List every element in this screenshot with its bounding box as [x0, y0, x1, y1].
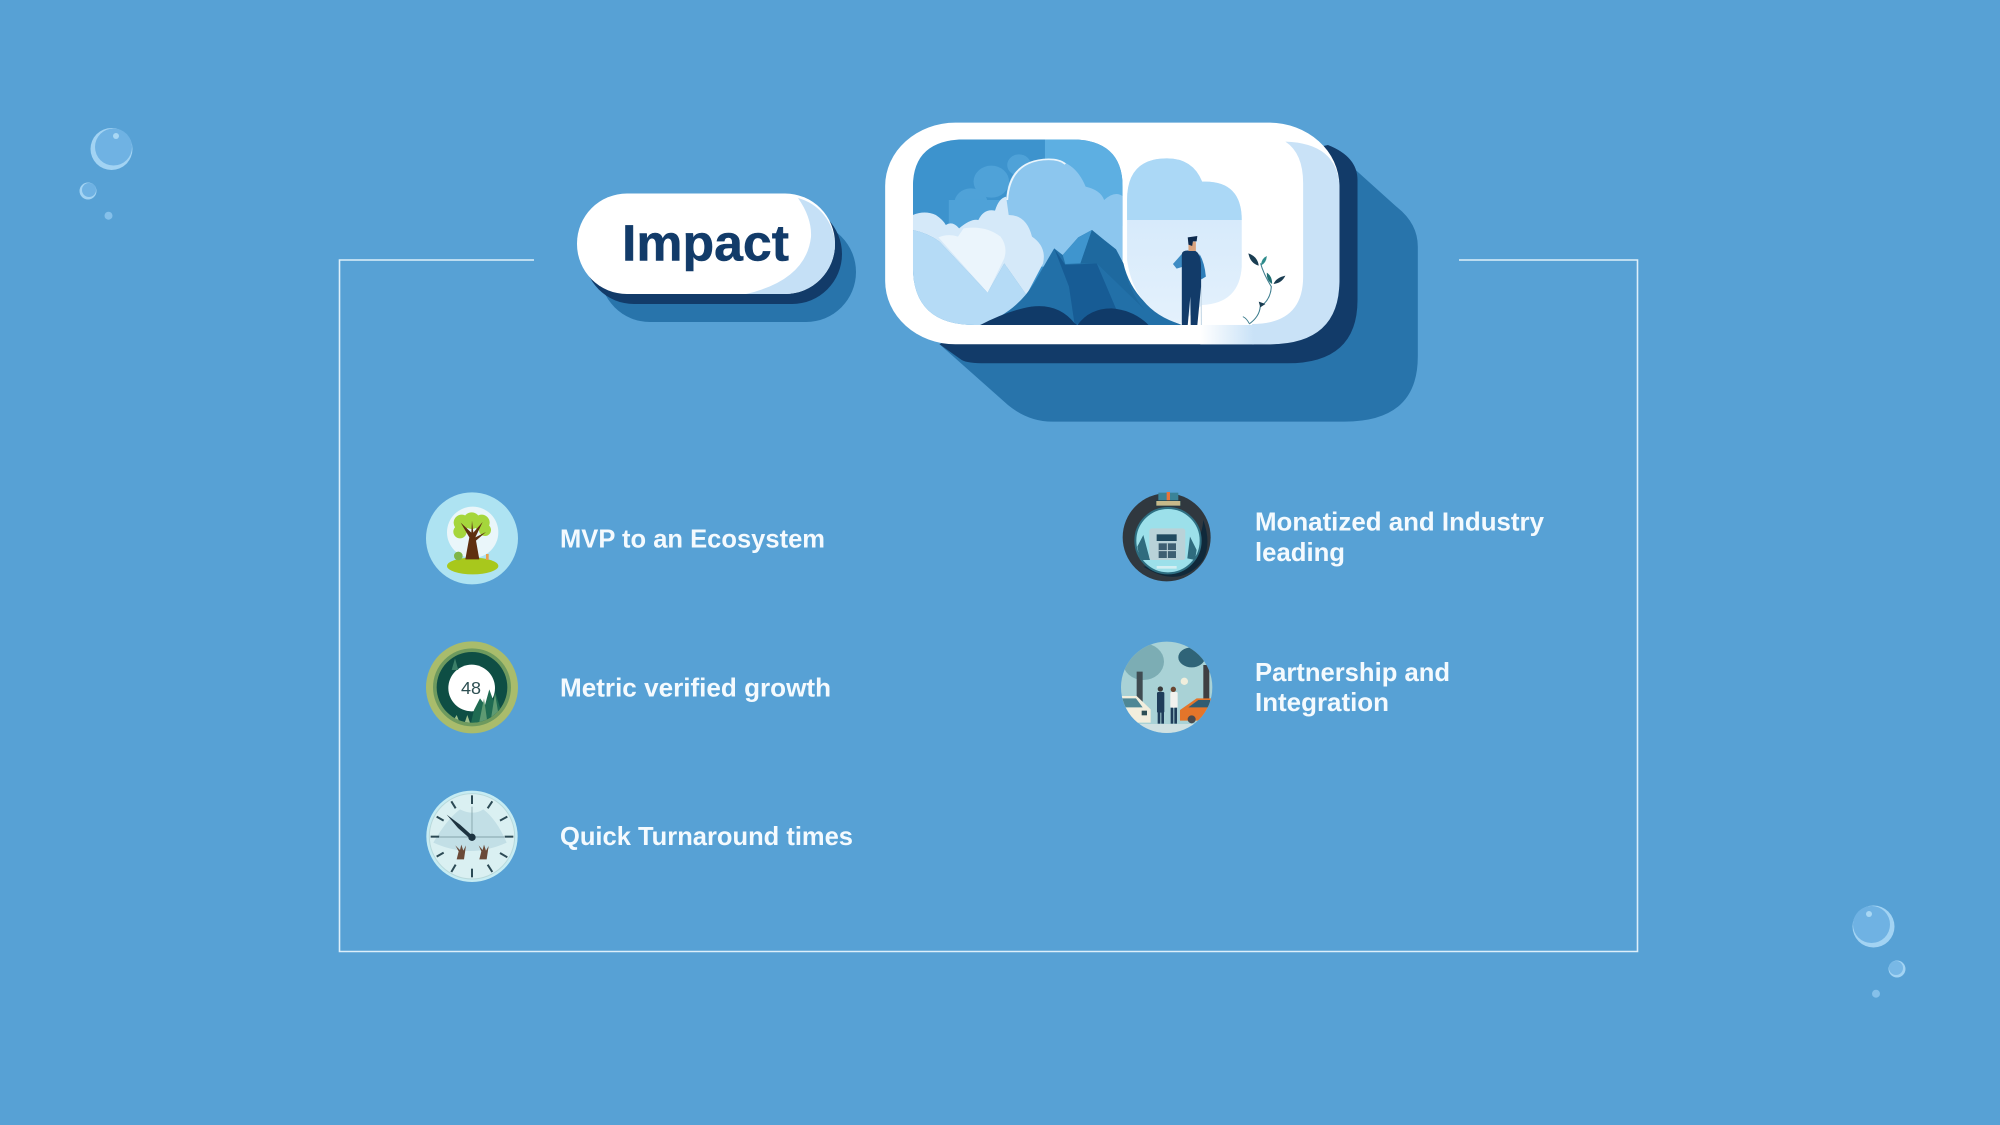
icon: partners handshake	[1120, 642, 1213, 737]
label: Integration	[1255, 687, 1389, 717]
item: MVP to an Ecosystem	[426, 492, 825, 584]
bubbles bottom right	[1852, 906, 1906, 998]
label: Partnership and	[1255, 657, 1450, 687]
item: Partnership and Integration	[1120, 642, 1450, 737]
label: Monatized and Industry	[1255, 507, 1545, 537]
heading: Impact	[622, 215, 789, 272]
title pill	[577, 194, 856, 322]
scene: mountains	[980, 230, 1182, 325]
bubbles top left	[80, 128, 132, 220]
item: Quick Turnaround times	[426, 791, 853, 882]
icon: clock	[426, 791, 518, 882]
icon: 48 gauge	[426, 641, 518, 733]
scene: right window with cloud	[1127, 158, 1242, 324]
plant sprout	[1243, 253, 1285, 324]
label: Metric verified growth	[560, 673, 831, 703]
item: Metric verified growth	[426, 641, 831, 733]
label	[1255, 657, 1450, 717]
label: Quick Turnaround times	[560, 821, 853, 851]
hero illustration: person viewing mountains	[885, 123, 1418, 422]
person with cane	[1173, 236, 1206, 325]
label: MVP to an Ecosystem	[560, 524, 825, 554]
item: Monatized and Industry leading	[1123, 492, 1545, 581]
scene: left window	[913, 139, 1124, 326]
content frame	[340, 260, 1638, 952]
icon: tree	[426, 492, 518, 584]
label	[1255, 507, 1545, 567]
icon: truck medal	[1123, 492, 1211, 581]
label: leading	[1255, 537, 1345, 567]
number: 48	[461, 678, 481, 698]
